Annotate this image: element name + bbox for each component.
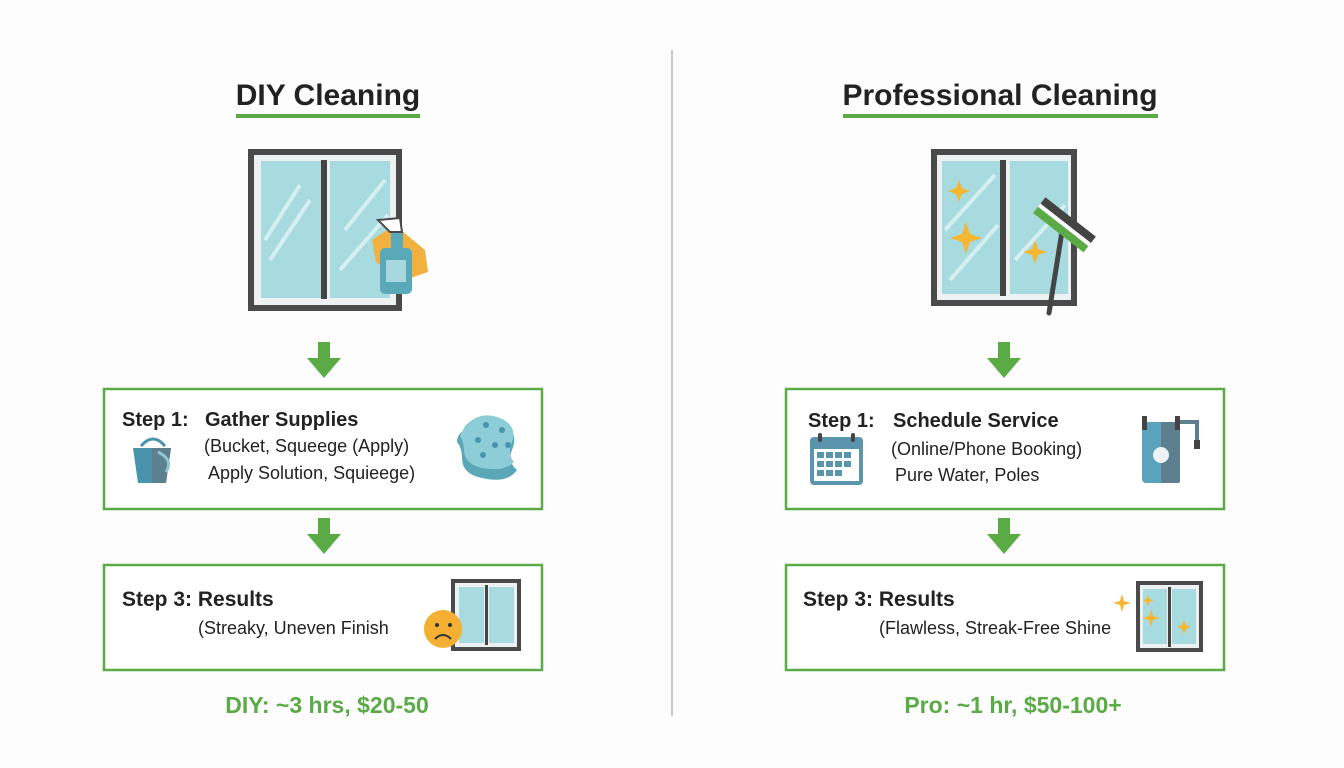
icon: Pro window with squeegee xyxy=(934,152,1096,313)
panel: Pro step 1: Step 1: xyxy=(808,410,875,432)
panel: Pro step 1: Schedule Service xyxy=(893,410,1059,432)
panel: DIY step 3: Step 3: Results xyxy=(122,588,274,611)
arrow: DIY 1 xyxy=(307,342,341,378)
title: DIY Cleaning: DIY Cleaning xyxy=(236,79,420,112)
arrow: Pro 2 xyxy=(987,518,1021,554)
icon: streaky window with sad face xyxy=(424,581,519,649)
footer: Pro cost: Pro: ~1 hr, $50-100+ xyxy=(904,692,1122,718)
icon: shiny window xyxy=(1113,583,1201,650)
icon: water tank xyxy=(1142,416,1200,483)
panel: DIY step 1 xyxy=(104,389,542,509)
panel: Pro step 3 xyxy=(786,565,1224,670)
footer: DIY cost: DIY: ~3 hrs, $20-50 xyxy=(225,692,429,718)
icon: calendar xyxy=(810,433,863,485)
arrow: DIY 2 xyxy=(307,518,341,554)
arrow: Pro 1 xyxy=(987,342,1021,378)
panel: DIY step 3: (Streaky, Uneven Finish xyxy=(198,618,389,638)
panel: Pro step 1: Pure Water, Poles xyxy=(895,465,1039,485)
icon: DIY window with spray bottle xyxy=(251,152,428,308)
panel: Pro step 1 xyxy=(786,389,1224,509)
panel: Pro step 1: (Online/Phone Booking) xyxy=(891,439,1082,459)
icon: bucket xyxy=(133,439,171,483)
panel: DIY step 1: Gather Supplies xyxy=(205,409,358,431)
panel: DIY step 1: (Bucket, Squeege (Apply) xyxy=(204,436,409,456)
title: Professional Cleaning: Professional Cleaning xyxy=(842,79,1158,112)
panel: DIY step 1: Apply Solution, Squieege) xyxy=(208,463,415,483)
panel: Pro step 3: Step 3: Results xyxy=(803,588,955,611)
panel: DIY step 3 xyxy=(104,565,542,670)
panel: DIY step 1: Step 1: xyxy=(122,409,189,431)
icon: sponge xyxy=(457,415,517,480)
panel: Pro step 3: (Flawless, Streak-Free Shine xyxy=(879,618,1111,638)
